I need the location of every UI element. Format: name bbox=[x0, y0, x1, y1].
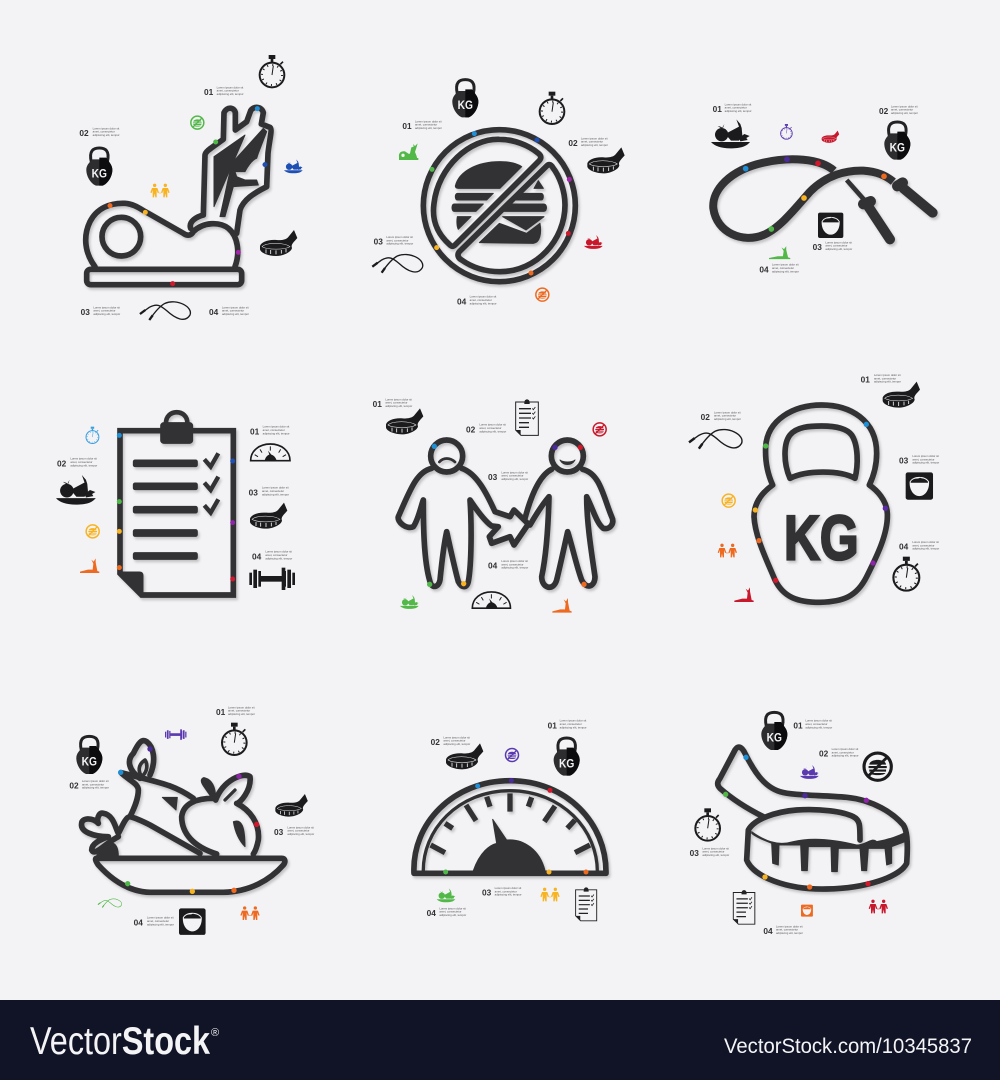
label 03: Lorem ipsum dolor sit bbox=[262, 486, 289, 490]
label 02: adipiscing elit, tempor bbox=[891, 111, 918, 115]
label 01: Lorem ipsum dolor sit bbox=[415, 119, 442, 123]
label 01: 01 bbox=[793, 720, 803, 730]
icon: food bowl bbox=[437, 888, 455, 902]
label 02: 02 bbox=[879, 106, 889, 116]
icon: clipboard bbox=[733, 890, 755, 924]
label 02 bbox=[568, 136, 608, 148]
label 04: 04 bbox=[427, 908, 436, 918]
label 01 bbox=[793, 719, 832, 730]
label 02: amet, consectetur bbox=[70, 460, 93, 464]
label 02: adipiscing elit, tempor bbox=[832, 754, 859, 758]
label 04: adipiscing elit, tempor bbox=[772, 269, 799, 273]
label 03: adipiscing elit, tempor bbox=[287, 832, 314, 836]
label 04 bbox=[209, 305, 249, 317]
registered mark: ® bbox=[211, 1027, 219, 1039]
icon: food bowl bbox=[800, 765, 819, 779]
coloured dots bbox=[753, 422, 888, 583]
label 03 bbox=[374, 235, 413, 247]
icon: clipboard bbox=[576, 887, 597, 921]
icon: skipping rope bbox=[140, 302, 190, 320]
label 03: Lorem ipsum dolor sit bbox=[702, 846, 729, 850]
icon: stopwatch bbox=[260, 55, 284, 87]
label 04: Lorem ipsum dolor sit bbox=[470, 295, 496, 299]
icon: kettlebell bbox=[884, 122, 910, 160]
footer url: VectorStock.com/10345837 bbox=[724, 1035, 972, 1058]
icon: people bbox=[718, 544, 737, 557]
label 03: 03 bbox=[488, 472, 498, 482]
label 03: 03 bbox=[482, 888, 492, 898]
label 04 bbox=[252, 550, 292, 561]
label 03: adipiscing elit, tempor bbox=[262, 492, 289, 496]
label 02: Lorem ipsum dolor sit bbox=[714, 410, 741, 414]
label 01: amet, consectetur bbox=[560, 722, 582, 726]
panel: skipping rope bbox=[711, 102, 933, 274]
panel: kettlebell bbox=[689, 373, 939, 602]
panel: weighing gauge bbox=[414, 719, 606, 921]
label 01: adipiscing elit, tempor bbox=[228, 712, 255, 716]
label 01: amet, consectetur bbox=[385, 401, 408, 405]
icon: tape measure bbox=[822, 131, 839, 143]
icon: food bowl bbox=[56, 475, 96, 505]
icon: weighing scale bbox=[818, 213, 843, 238]
label 03: Lorem ipsum dolor sit bbox=[287, 825, 314, 829]
icon: skipping rope bbox=[689, 430, 742, 449]
label 03 bbox=[488, 470, 528, 482]
label 02 bbox=[466, 423, 506, 434]
icon: food bowl bbox=[400, 595, 419, 609]
label 01: amet, consectetur bbox=[874, 376, 896, 380]
icon: kettlebell bbox=[76, 736, 102, 774]
panel: no burger sign bbox=[372, 80, 625, 306]
label 03 bbox=[690, 846, 729, 858]
label 01: amet, consectetur bbox=[263, 428, 285, 432]
label 04: adipiscing elit, tempor bbox=[470, 301, 497, 305]
label 02: amet, consectetur bbox=[82, 782, 104, 786]
label 01: 01 bbox=[373, 399, 382, 409]
label 01: adipiscing elit, tempor bbox=[385, 404, 412, 408]
label 01 bbox=[713, 102, 752, 114]
label 02: adipiscing elit, tempor bbox=[714, 417, 741, 421]
label 04: adipiscing elit, tempor bbox=[439, 913, 466, 917]
label 03 bbox=[899, 454, 939, 466]
label 02 bbox=[819, 747, 859, 759]
icon: food bowl bbox=[584, 235, 603, 249]
label 01: adipiscing elit, tempor bbox=[217, 92, 244, 96]
icon: no burger bbox=[505, 748, 518, 761]
label 01 bbox=[861, 373, 901, 385]
icon: tape measure bbox=[446, 743, 483, 769]
label 01: adipiscing elit, tempor bbox=[874, 380, 901, 384]
label 04: amet, consectetur bbox=[439, 910, 462, 914]
label 02 bbox=[431, 735, 470, 747]
icon: no burger bbox=[536, 288, 549, 301]
icon: kettlebell bbox=[554, 738, 580, 776]
icon: stopwatch bbox=[781, 124, 792, 139]
label 03: amet, consectetur bbox=[912, 457, 935, 461]
label 01: amet, consectetur bbox=[725, 106, 747, 110]
label 02: 02 bbox=[79, 128, 89, 138]
coloured dots bbox=[427, 444, 587, 587]
label 04 bbox=[899, 540, 939, 552]
label 04 bbox=[457, 295, 497, 306]
icon: clipboard bbox=[516, 399, 538, 435]
kettlebell line drawing bbox=[754, 405, 887, 602]
label 02: Lorem ipsum dolor sit bbox=[832, 747, 858, 751]
label 02: adipiscing elit, tempor bbox=[581, 143, 608, 147]
label 04: amet, consectetur bbox=[147, 919, 169, 923]
icon: no burger bbox=[593, 423, 606, 436]
label 03: adipiscing elit, tempor bbox=[495, 893, 522, 897]
label 01: Lorem ipsum dolor sit bbox=[228, 705, 255, 709]
food plate line drawing bbox=[82, 741, 285, 892]
label 01: Lorem ipsum dolor sit bbox=[725, 102, 751, 106]
icon: stopwatch bbox=[222, 723, 247, 755]
label 01 bbox=[216, 705, 255, 717]
panel: weight loss people bbox=[373, 397, 613, 613]
label 03: adipiscing elit, tempor bbox=[501, 477, 528, 481]
label 04: Lorem ipsum dolor sit bbox=[776, 924, 803, 928]
panel: exercise machine bbox=[79, 55, 303, 320]
label 04: adipiscing elit, tempor bbox=[776, 931, 803, 935]
label 01 bbox=[402, 119, 442, 131]
label 02: amet, consectetur bbox=[443, 739, 466, 743]
coloured dots bbox=[443, 778, 588, 874]
label 01: Lorem ipsum dolor sit bbox=[217, 85, 243, 89]
footer bar bbox=[0, 1000, 1000, 1080]
icon: tape measure bbox=[250, 503, 287, 529]
label 04: 04 bbox=[759, 264, 769, 274]
clipboard line drawing bbox=[120, 412, 233, 595]
panel: food plate bbox=[69, 705, 314, 935]
label 02: Lorem ipsum dolor sit bbox=[891, 104, 918, 108]
label 03: amet, consectetur bbox=[386, 238, 409, 242]
icon: stopwatch bbox=[540, 92, 564, 124]
label 01: adipiscing elit, tempor bbox=[725, 109, 752, 113]
icon: food bowl bbox=[711, 119, 750, 148]
label 01: 01 bbox=[861, 375, 870, 385]
icon: machine bbox=[734, 587, 754, 602]
label 01: adipiscing elit, tempor bbox=[805, 725, 832, 729]
label 02: Lorem ipsum dolor sit bbox=[479, 423, 506, 427]
label 04: 04 bbox=[763, 926, 773, 936]
label 04: Lorem ipsum dolor sit bbox=[912, 540, 939, 544]
label 03: Lorem ipsum dolor sit bbox=[495, 886, 521, 890]
label 01 bbox=[250, 425, 290, 436]
icon: dumbbell bbox=[249, 568, 295, 590]
label 02: 02 bbox=[466, 424, 476, 434]
label 02 bbox=[79, 126, 120, 138]
label 02 bbox=[879, 104, 918, 116]
label 03: 03 bbox=[249, 487, 258, 497]
label 03 bbox=[813, 240, 852, 252]
label 01: Lorem ipsum dolor sit bbox=[560, 719, 586, 723]
label 04: adipiscing elit, tempor bbox=[265, 556, 292, 560]
label 04: Lorem ipsum dolor sit bbox=[501, 559, 528, 563]
label 01: 01 bbox=[713, 104, 722, 114]
label 04: amet, consectetur bbox=[265, 553, 288, 557]
kettlebell line drawing: KG bbox=[784, 503, 859, 573]
no burger line drawing bbox=[423, 130, 575, 282]
label 02: adipiscing elit, tempor bbox=[443, 742, 470, 746]
icon: people bbox=[240, 906, 260, 920]
icon: stopwatch bbox=[695, 808, 720, 841]
label 02: adipiscing elit, tempor bbox=[93, 133, 120, 137]
icon: people bbox=[540, 888, 560, 901]
label 01: amet, consectetur bbox=[228, 709, 250, 713]
label 01: 01 bbox=[250, 426, 260, 436]
icon: tape measure bbox=[260, 230, 297, 256]
coloured dots bbox=[107, 106, 267, 286]
icon: gauge bbox=[251, 444, 290, 461]
label 03: Lorem ipsum dolor sit bbox=[93, 305, 120, 309]
coloured dots bbox=[723, 755, 871, 890]
label 04: amet, consectetur bbox=[222, 309, 244, 313]
label 01: adipiscing elit, tempor bbox=[263, 431, 290, 435]
label 01: Lorem ipsum dolor sit bbox=[263, 425, 289, 429]
label 04: amet, consectetur bbox=[776, 928, 798, 932]
label 03: 03 bbox=[690, 848, 699, 858]
label 03: amet, consectetur bbox=[93, 309, 116, 313]
label 04: 04 bbox=[209, 307, 219, 317]
tape measure line drawing bbox=[718, 747, 907, 889]
label 04: amet, consectetur bbox=[501, 562, 524, 566]
label 02: amet, consectetur bbox=[93, 130, 115, 134]
label 04: 04 bbox=[457, 296, 467, 306]
label 03 bbox=[249, 486, 289, 497]
label 03: adipiscing elit, tempor bbox=[702, 853, 729, 857]
label 02: 02 bbox=[57, 458, 67, 468]
label 02: amet, consectetur bbox=[479, 426, 502, 430]
label 04 bbox=[759, 263, 799, 274]
icon: skipping rope bbox=[98, 899, 122, 907]
label 03: adipiscing elit, tempor bbox=[825, 247, 852, 251]
icon: gauge bbox=[472, 592, 510, 608]
label 03: Lorem ipsum dolor sit bbox=[912, 454, 939, 458]
label 03: Lorem ipsum dolor sit bbox=[825, 240, 852, 244]
icon: dumbbell bbox=[165, 729, 186, 740]
label 01: Lorem ipsum dolor sit bbox=[874, 373, 901, 377]
label 02: 02 bbox=[701, 412, 710, 422]
label 01: amet, consectetur bbox=[805, 722, 828, 726]
label 01: 01 bbox=[402, 121, 412, 131]
icon: stopwatch bbox=[893, 557, 919, 591]
label 02: amet, consectetur bbox=[832, 750, 854, 754]
label 02: Lorem ipsum dolor sit bbox=[443, 735, 470, 739]
label 04: 04 bbox=[252, 551, 262, 561]
label 04: 04 bbox=[134, 917, 143, 927]
icon: tape measure bbox=[883, 382, 920, 408]
label 02: amet, consectetur bbox=[714, 414, 736, 418]
label 04: Lorem ipsum dolor sit bbox=[265, 550, 292, 554]
label 04: adipiscing elit, tempor bbox=[222, 312, 249, 316]
icon: people bbox=[150, 184, 170, 197]
label 03 bbox=[482, 886, 522, 898]
label 03: adipiscing elit, tempor bbox=[912, 461, 939, 465]
label 03: Lorem ipsum dolor sit bbox=[386, 235, 413, 239]
label 02: 02 bbox=[69, 781, 79, 791]
label 04: 04 bbox=[899, 542, 909, 552]
icon: no burger bbox=[864, 753, 891, 780]
label 03: adipiscing elit, tempor bbox=[93, 312, 120, 316]
label 04: Lorem ipsum dolor sit bbox=[439, 906, 466, 910]
label 03: amet, consectetur bbox=[501, 474, 524, 478]
icon: weighing scale bbox=[179, 908, 206, 935]
label 01: adipiscing elit, tempor bbox=[560, 725, 587, 729]
icon: kettlebell bbox=[452, 80, 478, 117]
panel: clipboard checklist bbox=[56, 412, 295, 595]
label 02: adipiscing elit, tempor bbox=[82, 786, 109, 790]
label 02: Lorem ipsum dolor sit bbox=[93, 126, 119, 130]
label 02 bbox=[57, 457, 97, 468]
label 03: 03 bbox=[899, 456, 909, 466]
label 01: amet, consectetur bbox=[217, 89, 239, 93]
label 02: amet, consectetur bbox=[891, 108, 913, 112]
label 04: amet, consectetur bbox=[470, 298, 492, 302]
coloured dots bbox=[429, 131, 572, 275]
label 03: 03 bbox=[274, 827, 284, 837]
label 04: adipiscing elit, tempor bbox=[912, 547, 939, 551]
label 04: adipiscing elit, tempor bbox=[501, 566, 528, 570]
rope line drawing bbox=[713, 159, 933, 239]
label 02: Lorem ipsum dolor sit bbox=[70, 457, 97, 461]
icon: weighing scale bbox=[906, 472, 933, 500]
label 03: amet, consectetur bbox=[495, 889, 517, 893]
label 04 bbox=[763, 924, 803, 936]
icon: no burger bbox=[191, 116, 204, 129]
icon: weighing scale bbox=[801, 905, 813, 917]
label 04: Lorem ipsum dolor sit bbox=[222, 305, 249, 309]
footer logo: VectorStock bbox=[30, 1020, 210, 1063]
label 04: adipiscing elit, tempor bbox=[147, 922, 174, 926]
label 03: 03 bbox=[81, 307, 90, 317]
label 02: 02 bbox=[819, 749, 829, 759]
label 02 bbox=[701, 410, 741, 422]
label 03 bbox=[274, 825, 314, 837]
label 02: adipiscing elit, tempor bbox=[70, 463, 97, 467]
label 02: 02 bbox=[568, 138, 578, 148]
label 04: Lorem ipsum dolor sit bbox=[772, 263, 799, 267]
label 01: Lorem ipsum dolor sit bbox=[805, 719, 832, 723]
label 03: Lorem ipsum dolor sit bbox=[501, 470, 528, 474]
icon: tape measure bbox=[587, 147, 625, 173]
label 02: adipiscing elit, tempor bbox=[479, 429, 506, 433]
label 01: 01 bbox=[216, 707, 226, 717]
label 01 bbox=[373, 397, 412, 409]
icon: stopwatch bbox=[86, 427, 99, 443]
label 04 bbox=[488, 559, 528, 571]
label 04: amet, consectetur bbox=[912, 543, 935, 547]
label 03: amet, consectetur bbox=[825, 244, 848, 248]
label 04 bbox=[134, 916, 174, 927]
icon: people bbox=[869, 900, 888, 913]
panel: tape measure bbox=[690, 712, 907, 936]
icon: kettlebell bbox=[86, 148, 112, 186]
label 01: 01 bbox=[204, 87, 214, 97]
label 04: Lorem ipsum dolor sit bbox=[147, 916, 174, 920]
icon: tape measure bbox=[275, 794, 308, 817]
people line drawing bbox=[398, 440, 613, 587]
label 03: amet, consectetur bbox=[702, 850, 725, 854]
label 01: amet, consectetur bbox=[415, 123, 437, 127]
icon: kettlebell bbox=[761, 712, 787, 750]
coloured dots bbox=[118, 746, 259, 894]
icon: no burger bbox=[722, 494, 735, 507]
icon: skipping rope bbox=[372, 254, 423, 273]
icon: food bowl bbox=[284, 159, 303, 173]
coloured dots bbox=[117, 433, 235, 581]
icon: no burger bbox=[86, 525, 99, 538]
label 02: Lorem ipsum dolor sit bbox=[581, 136, 608, 140]
label 03: amet, consectetur bbox=[262, 489, 284, 493]
gauge line drawing bbox=[414, 781, 606, 873]
label 02 bbox=[69, 779, 109, 791]
label 04: 04 bbox=[488, 561, 498, 571]
label 03: 03 bbox=[374, 237, 383, 247]
label 02: 02 bbox=[431, 737, 440, 747]
label 03: 03 bbox=[813, 242, 822, 252]
label 01: 01 bbox=[548, 720, 557, 730]
label 01 bbox=[548, 719, 587, 730]
label 01 bbox=[204, 85, 244, 97]
label 03: adipiscing elit, tempor bbox=[386, 242, 413, 246]
icon: machine bbox=[80, 558, 99, 573]
label 03 bbox=[81, 305, 120, 317]
coloured dots bbox=[743, 156, 887, 232]
icon: machine bbox=[552, 598, 572, 613]
label 03: amet, consectetur bbox=[287, 829, 310, 833]
label 02: amet, consectetur bbox=[581, 140, 603, 144]
label 04: amet, consectetur bbox=[772, 266, 794, 270]
machine line drawing bbox=[86, 107, 271, 285]
icon: machine bbox=[769, 246, 790, 259]
icon: machine bbox=[399, 143, 418, 160]
label 04 bbox=[427, 906, 466, 918]
label 01: Lorem ipsum dolor sit bbox=[385, 397, 412, 401]
icon: tape measure bbox=[386, 408, 423, 434]
label 01: adipiscing elit, tempor bbox=[415, 126, 442, 130]
label 02: Lorem ipsum dolor sit bbox=[82, 779, 109, 783]
